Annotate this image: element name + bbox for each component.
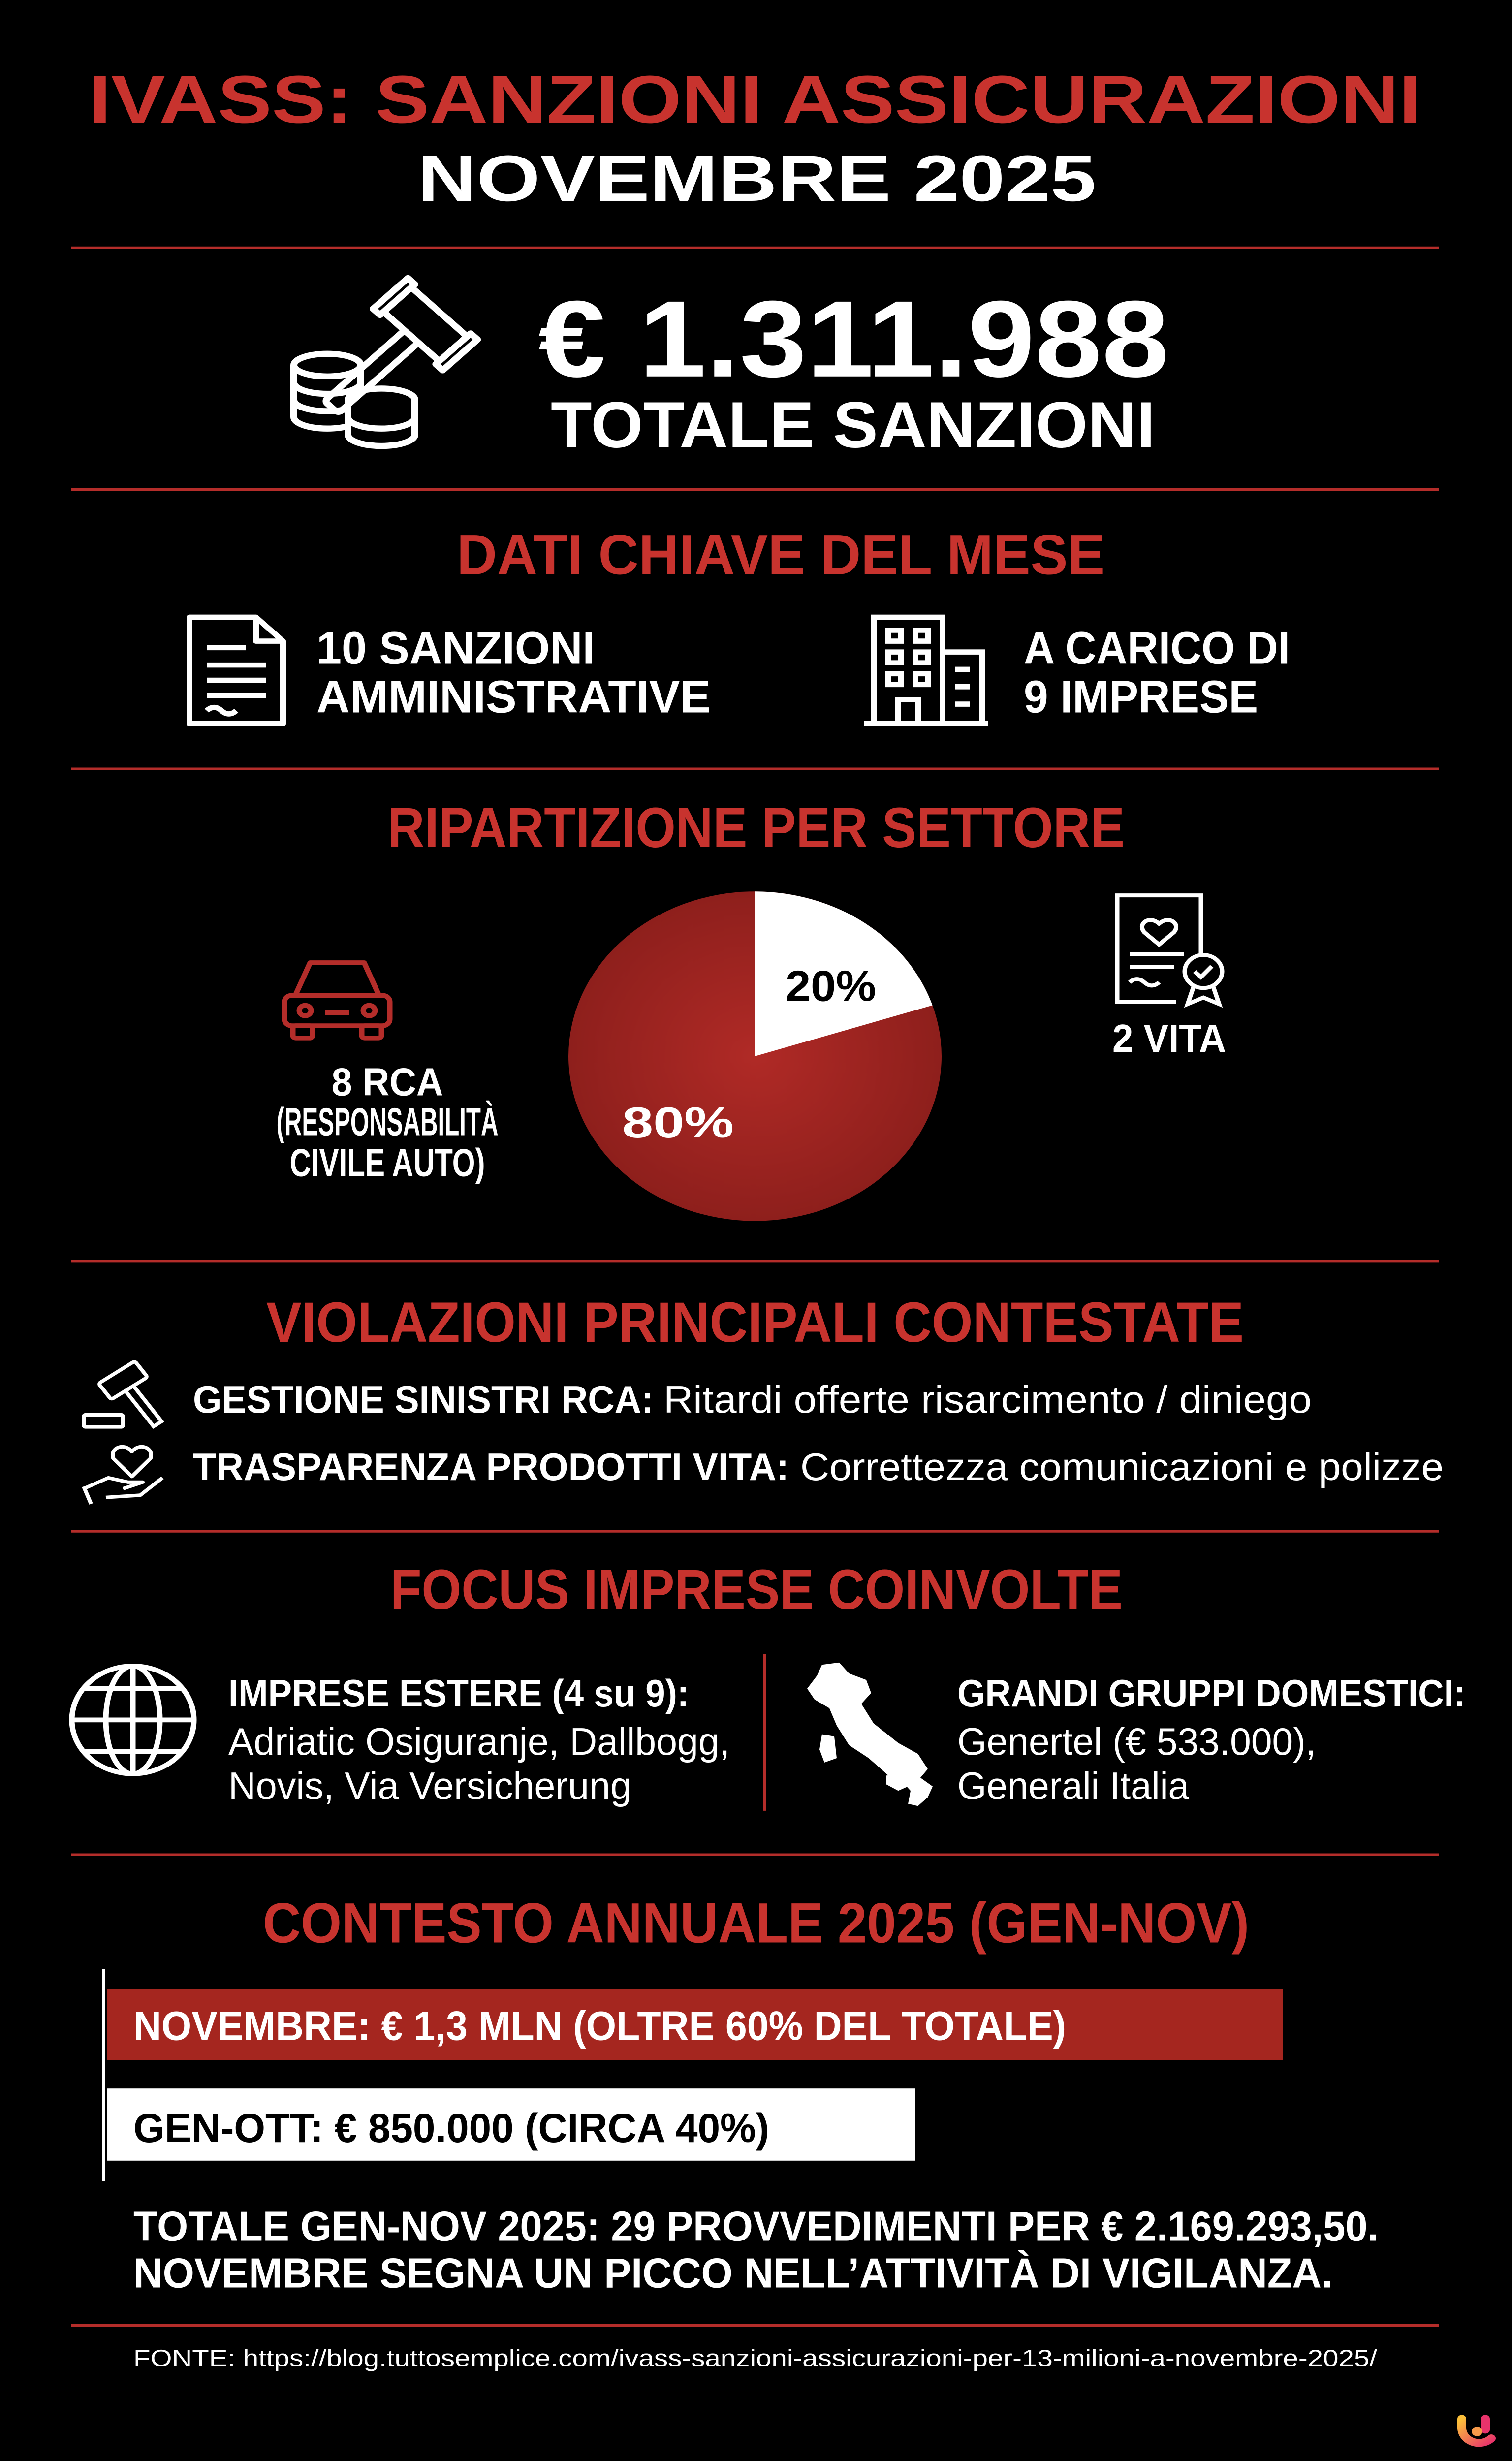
violation row 1: GESTIONE SINISTRI RCA:: [193, 1378, 654, 1421]
violation row 1: Ritardi offerte risarcimento / diniego: [663, 1378, 1312, 1421]
total amount: € 1.311.988: [538, 278, 1169, 400]
heading: ripartizione: RIPARTIZIONE PER SETTORE: [387, 796, 1125, 859]
total amount: TOTALE SANZIONI: [551, 388, 1155, 461]
foreign companies: IMPRESE ESTERE (4 su 9):: [228, 1672, 689, 1715]
violation row 2: [193, 1446, 1444, 1488]
key data: sanzioni: AMMINISTRATIVE: [316, 671, 711, 722]
icon: document: [189, 617, 283, 724]
foreign companies: Adriatic Osiguranje, Dallbogg,: [228, 1720, 730, 1763]
heading: focus: FOCUS IMPRESE COINVOLTE: [390, 1558, 1123, 1621]
pie chart: 80%: [622, 1098, 734, 1147]
key data: sanzioni: [316, 622, 711, 722]
title: NOVEMBRE 2025: [417, 142, 1096, 215]
logo: [1462, 2419, 1491, 2443]
icon: gavel: [84, 1361, 176, 1435]
total amount: [538, 278, 1169, 461]
domestic groups: Generali Italia: [957, 1765, 1190, 1807]
label: vita: 2 VITA: [1112, 1016, 1226, 1060]
label: RCA: (RESPONSABILITÀ: [277, 1100, 499, 1143]
label: RCA: CIVILE AUTO): [290, 1141, 485, 1184]
domestic groups: [957, 1672, 1466, 1807]
bar chart: NOVEMBRE: € 1,3 MLN (OLTRE 60% DEL TOTALE): [133, 2002, 1066, 2049]
source: FONTE: https://blog.tuttosemplice.com/ivass-sanzioni-assicurazioni-per-13-milioni-a-novembre-2025/: [133, 2344, 1378, 2371]
key data: imprese: [1024, 622, 1290, 722]
summary text: NOVEMBRE SEGNA UN PICCO NELL’ATTIVITÀ DI VIGILANZA.: [133, 2250, 1333, 2297]
violation row 2: TRASPARENZA PRODOTTI VITA:: [193, 1446, 789, 1488]
icon: italy map: [807, 1663, 933, 1806]
icon: life certificate: [1117, 895, 1222, 1004]
title: [89, 62, 1421, 215]
domestic groups: Genertel (€ 533.000),: [957, 1720, 1316, 1763]
icon: car: [284, 963, 390, 1038]
icon: coins and gavel: [294, 278, 477, 446]
heading: dati chiave: DATI CHIAVE DEL MESE: [457, 523, 1105, 586]
icon: globe: [72, 1666, 194, 1774]
key data: imprese: A CARICO DI: [1024, 622, 1290, 673]
key data: sanzioni: 10 SANZIONI: [316, 622, 595, 673]
bar chart: [103, 1969, 1283, 2181]
pie chart: [568, 891, 942, 1221]
violation row 2: Correttezza comunicazioni e polizze: [800, 1446, 1444, 1488]
foreign companies: Novis, Via Versicherung: [228, 1765, 631, 1807]
label: RCA: 8 RCA: [332, 1060, 443, 1104]
key data: imprese: 9 IMPRESE: [1024, 671, 1258, 722]
icon: heart in hand: [84, 1447, 162, 1504]
foreign companies: [228, 1672, 730, 1807]
summary text: [133, 2203, 1379, 2297]
title: IVASS: SANZIONI ASSICURAZIONI: [89, 62, 1421, 137]
violation row 1: [193, 1378, 1312, 1421]
icon: building: [864, 617, 988, 724]
label: RCA: [277, 1060, 499, 1184]
pie chart: 20%: [786, 962, 876, 1010]
heading: contesto annuale: CONTESTO ANNUALE 2025 (GEN-NOV): [263, 1892, 1249, 1955]
heading: violazioni: VIOLAZIONI PRINCIPALI CONTESTATE: [266, 1291, 1244, 1354]
bar chart: GEN-OTT: € 850.000 (CIRCA 40%): [133, 2105, 769, 2151]
